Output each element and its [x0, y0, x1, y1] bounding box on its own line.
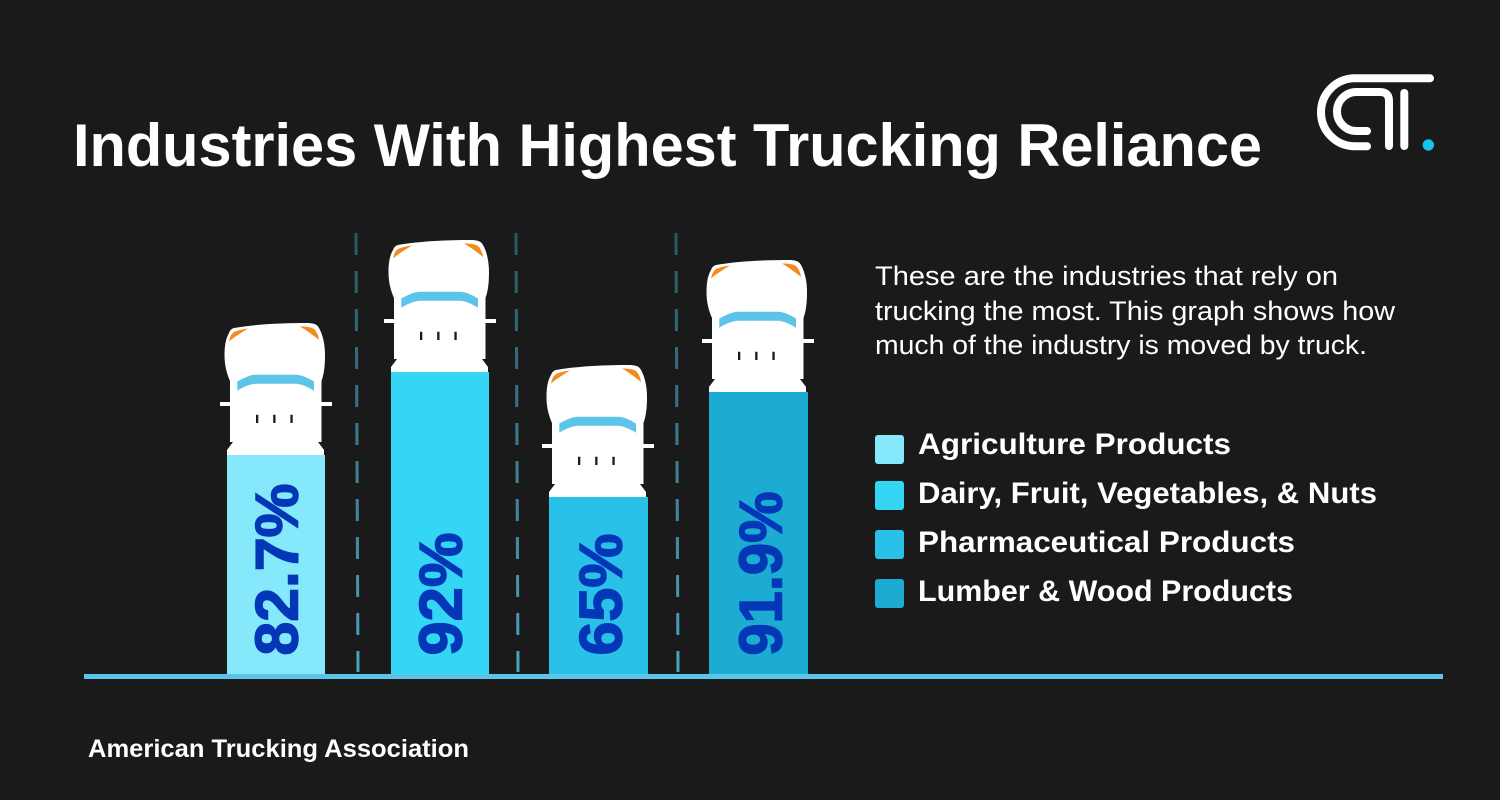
value 92%: 92% — [408, 532, 474, 656]
truck cab 1 — [220, 323, 332, 455]
chart baseline — [84, 674, 1443, 679]
bar: Lumber & Wood Products 91.9% — [702, 260, 814, 674]
title: Industries With Highest Trucking Reliance — [73, 112, 1262, 179]
value 91.9%: 91.9% — [728, 492, 794, 656]
truck cab 3 — [542, 365, 654, 497]
truck cab 4 — [702, 260, 814, 392]
description text: much of the industry is moved by truck. — [875, 330, 1367, 360]
value 65%: 65% — [568, 533, 634, 656]
value 82.7%: 82.7% — [244, 483, 310, 656]
description text: These are the industries that rely on — [875, 261, 1338, 291]
bar: Dairy, Fruit, Vegetables, & Nuts 92% — [384, 240, 496, 674]
legend item: Agriculture Products: Agriculture Products — [918, 428, 1231, 461]
legend item: Dairy, Fruit, Vegetables, & Nuts: Dairy, Fruit, Vegetables, & Nuts — [918, 477, 1377, 510]
legend item: Lumber & Wood Products: Lumber & Wood Products — [918, 575, 1293, 608]
legend — [875, 428, 1377, 608]
logo: CT — [1321, 78, 1434, 151]
bar: Agriculture Products 82.7% — [220, 323, 332, 674]
dashed column separators — [356, 233, 678, 672]
bar: Pharmaceutical Products 65% — [542, 365, 654, 674]
source: American Trucking Association — [88, 735, 469, 763]
description text — [875, 261, 1396, 360]
truck cab 2 — [384, 240, 496, 372]
description text: trucking the most. This graph shows how — [875, 296, 1396, 326]
legend item: Pharmaceutical Products: Pharmaceutical Products — [918, 526, 1295, 559]
bar chart — [220, 240, 814, 674]
